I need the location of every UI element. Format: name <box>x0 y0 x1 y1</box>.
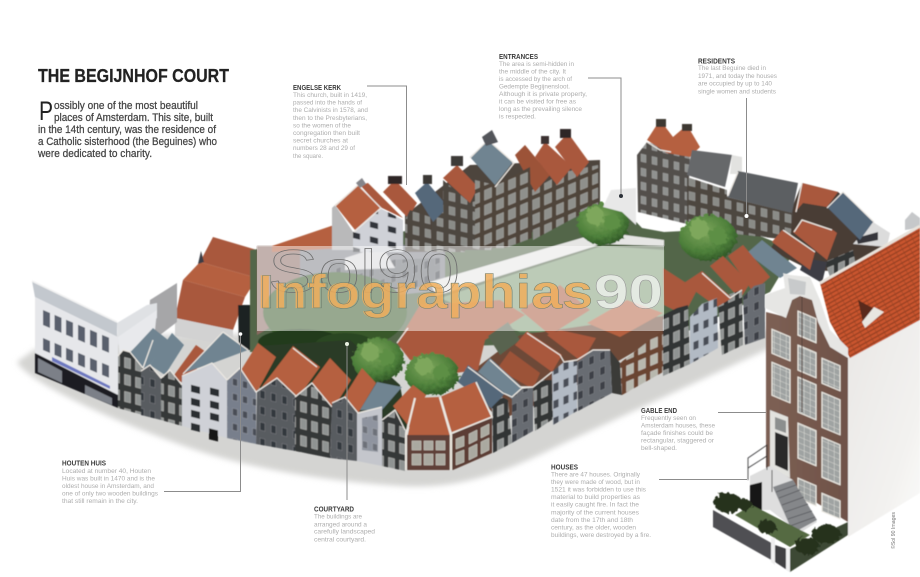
callout: Houten Huis: one of only two wooden buildings <box>62 492 158 498</box>
callout: Engelse Kerk <box>293 85 406 185</box>
callout: Houten Huis: oldest house in Amsterdam, and <box>62 484 154 490</box>
callout: Courtyard: carefully landscaped <box>314 530 375 536</box>
callout: Houses: they were made of wood, but in <box>551 480 640 486</box>
watermark: Infographias <box>259 265 593 318</box>
illustration: Begijnhof buildings <box>32 119 920 471</box>
callout: Houten Huis: that still remain in the city. <box>62 499 138 505</box>
callout: Entrances: Gedempte Begijnensloot. <box>499 84 570 90</box>
far right row roofs <box>772 220 857 283</box>
callout: Engelse Kerk: passed into the hands of <box>293 101 362 107</box>
callout: Residents: The last Beguine died in <box>698 66 766 72</box>
callout: Gable End: GABLE END <box>641 408 677 415</box>
tree: residents <box>679 215 737 261</box>
callout: Houses: material to build properties as <box>551 495 640 501</box>
callout: Courtyard: COURTYARD <box>314 506 354 514</box>
intro text: a Catholic sisterhood (the Beguines) who <box>38 136 217 148</box>
image credit: ©Sol 90 Images <box>890 511 897 549</box>
callout: Residents <box>698 58 777 218</box>
icon: roof dormer <box>858 300 884 328</box>
callout: Engelse Kerk: congregation then built <box>293 131 360 137</box>
callout: Gable End: façade finishes could be <box>641 431 714 437</box>
callout: Engelse Kerk: so the women of the <box>293 123 352 129</box>
intro text: were dedicated to charity. <box>37 148 152 160</box>
inner brick roofs: right row <box>397 285 663 420</box>
courtyard path <box>430 232 664 332</box>
callout: Houten Huis <box>62 332 242 505</box>
callout: Gable End: rectangular, staggered or <box>641 439 714 445</box>
callout: Houses: date from the 17th and 18th <box>551 518 633 524</box>
callout: Houses: it easily caught fire. In fact the <box>551 503 640 509</box>
callout: Entrances: ENTRANCES <box>499 54 538 61</box>
big house: cut-away wall and roof <box>713 226 920 572</box>
watermark: Infographias <box>257 265 593 318</box>
tree: entrances <box>577 203 629 245</box>
intro text: in the 14th century, was the residence of <box>38 124 217 136</box>
callout: Engelse Kerk: ENGELSE KERK <box>293 85 341 92</box>
callout: Houten Huis: Huis was built in 1470 and is the <box>62 477 156 483</box>
back-right row <box>637 119 920 272</box>
right row houses <box>458 240 797 453</box>
callout: Engelse Kerk: numbers 28 and 29 of <box>293 146 355 152</box>
callout: Engelse Kerk: then to the Presbyterians, <box>293 116 367 122</box>
callout: Entrances <box>499 54 623 198</box>
watermark: Sol90 <box>268 238 460 305</box>
front row backing <box>258 340 408 430</box>
callout: Entrances: The area is semi-hidden in <box>499 62 574 68</box>
callout: Courtyard <box>314 342 375 543</box>
back row: Engelse Kerk <box>272 129 600 252</box>
callout: Engelse Kerk: the Calvinists in 1578, and <box>293 108 368 114</box>
courtyard ground <box>250 205 795 352</box>
courtyard back facades <box>257 245 445 335</box>
callout: Gable End <box>641 408 766 452</box>
callout: Entrances: Although it is private property, <box>499 92 587 98</box>
callout: Houses: There are 47 houses. Originally <box>551 472 640 478</box>
callout: Residents: single women and students <box>698 90 776 96</box>
callout: Houses: 1521 it was forbidden to use this <box>551 488 646 494</box>
entrance wall <box>603 188 636 225</box>
callout: Entrances: it can be visited for free as <box>499 100 576 106</box>
gable end internal pointer <box>801 297 803 412</box>
callout: Houses: buildings, were destroyed by a fire. <box>551 533 651 539</box>
big house windows <box>772 300 840 519</box>
door <box>770 410 790 478</box>
garden <box>713 493 848 572</box>
gable trim <box>765 273 848 358</box>
callout: Engelse Kerk: This church, built in 1419, <box>293 93 367 99</box>
callout: Entrances: is respected. <box>499 114 536 120</box>
callout: Gable End: Frequently seen on <box>641 416 696 422</box>
callout: Residents: are occupied by up to 140 <box>698 82 773 88</box>
callout: Courtyard: The buildings are <box>314 515 363 521</box>
watermark: 90 <box>594 265 663 318</box>
callout: Entrances: long as the prevailing silence <box>499 107 583 113</box>
callout: Gable End: Amsterdam houses, these <box>641 423 716 429</box>
front row houses <box>118 328 426 471</box>
ground shadow <box>17 330 770 487</box>
callout: Residents: RESIDENTS <box>698 58 735 66</box>
callout: Entrances: the middle of the city. It <box>499 70 566 76</box>
watermark <box>257 238 664 331</box>
back-left roofs <box>175 237 257 350</box>
intro text: places of Amsterdam. This site, built <box>54 112 213 124</box>
callout: Houses <box>551 464 747 539</box>
callout: Houses: HOUSES <box>551 464 578 472</box>
tree: courtyard left <box>352 338 404 382</box>
callout: Courtyard: arranged around a <box>314 522 368 528</box>
callout: Houses: majority of the current houses <box>551 510 639 516</box>
callout: Entrances: is accessed by the arch of <box>499 77 572 83</box>
callout: Houten Huis: HOUTEN HUIS <box>62 460 106 468</box>
intro text: P <box>39 96 53 126</box>
intro text <box>37 96 217 160</box>
stoop and stairs <box>748 445 817 533</box>
big house facade <box>766 295 848 522</box>
callout: Courtyard: central courtyard. <box>314 537 366 543</box>
callout: Engelse Kerk: secret churches at <box>293 139 348 145</box>
title: THE BEGIJNHOF COURT <box>38 65 230 86</box>
callout: Houten Huis: Located at number 40, Houten <box>62 469 151 475</box>
callout: Engelse Kerk: the square. <box>293 154 323 160</box>
intro text: ossibly one of the most beautiful <box>54 100 198 112</box>
tree: courtyard right <box>405 353 459 395</box>
courtyard planting <box>258 272 407 357</box>
office block side <box>117 283 177 360</box>
callout: Houses: century, as the older, wooden <box>551 526 636 532</box>
corner brick house <box>406 382 492 470</box>
callout: Residents: 1971, and today the houses <box>698 74 777 80</box>
office building: Spui front <box>32 281 118 408</box>
callout: Gable End: bell-shaped. <box>641 446 677 452</box>
